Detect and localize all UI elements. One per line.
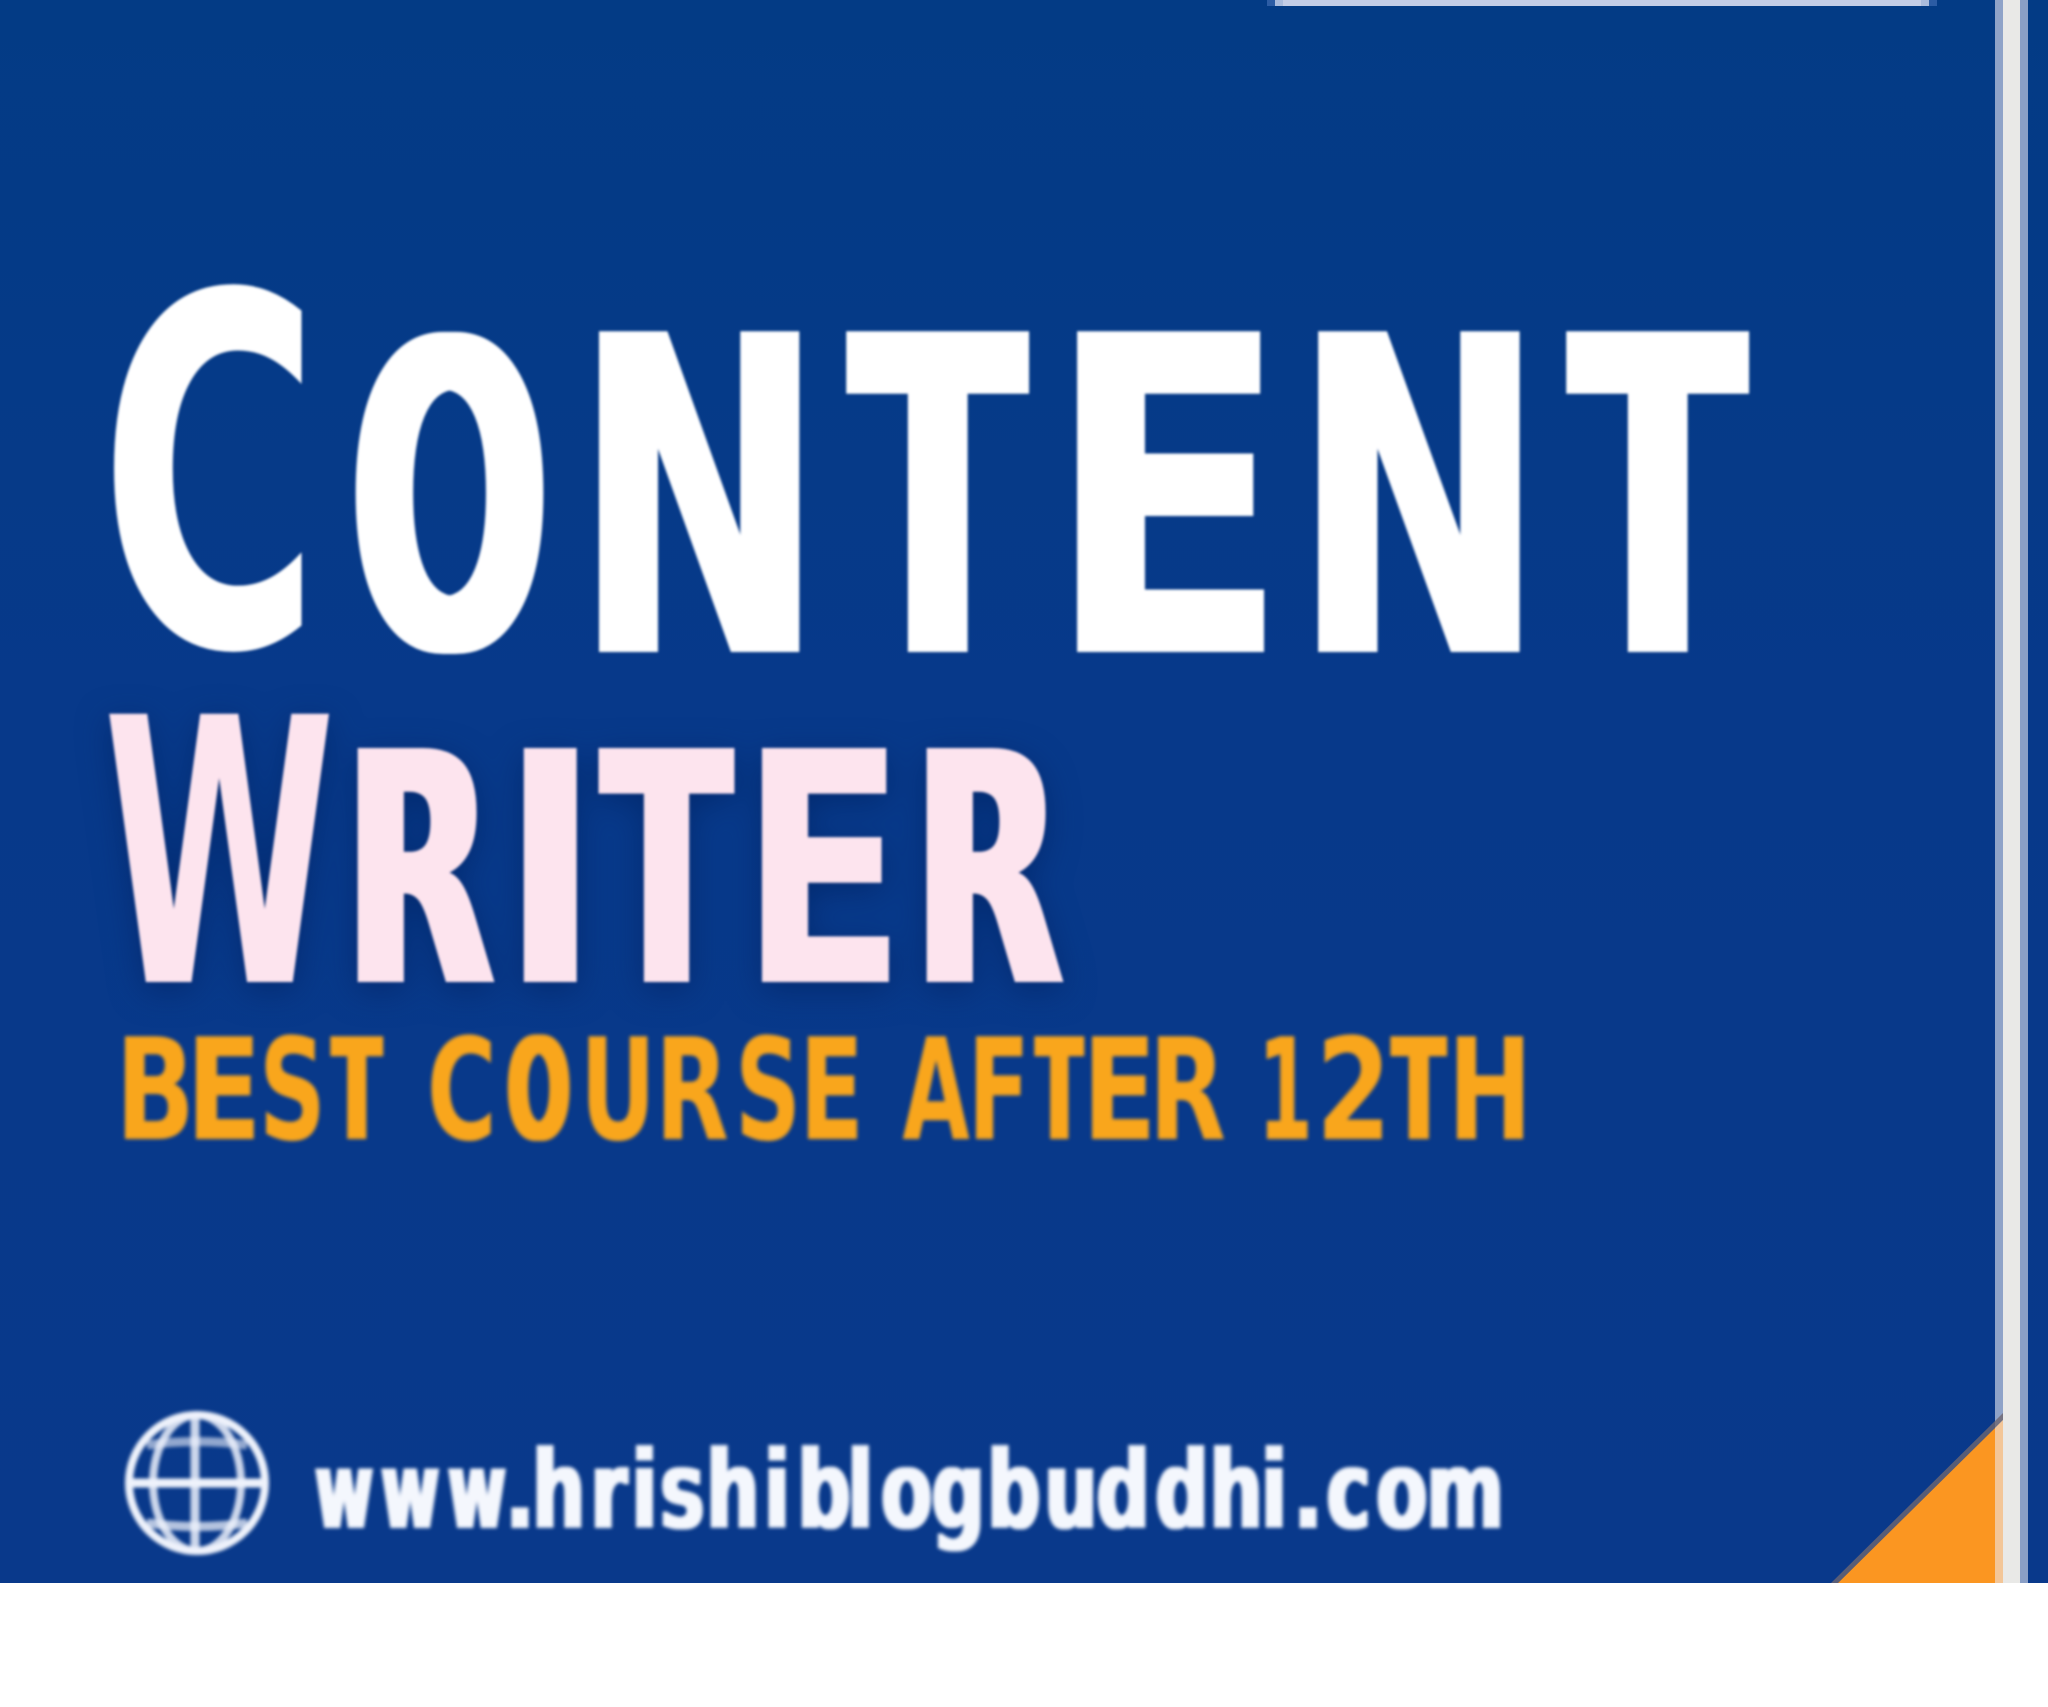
subheading: best course after 12th: R [655, 1009, 729, 1173]
top right light bar [1267, 0, 1937, 6]
subheading: best course after 12th: E [799, 1010, 864, 1173]
subheading: best course after 12th: O [507, 1008, 570, 1173]
website url: www [315, 1428, 506, 1555]
subheading: best course after 12th: S [259, 1009, 326, 1173]
subheading: best course after 12th: H [1448, 1008, 1532, 1172]
heading: Writer: R [914, 685, 1062, 1058]
corner triangle: orange [1831, 1413, 2003, 1583]
subheading: best course after 12th: B [115, 1009, 195, 1173]
icon: globe [129, 1415, 265, 1551]
subheading: best course after 12th: S [735, 1010, 801, 1173]
subheading: best course after 12th [115, 1008, 1532, 1173]
subheading: best course after 12th: T [1393, 1008, 1445, 1173]
heading: Writer: R [345, 685, 493, 1058]
heading: Content: C [99, 195, 321, 760]
heading: Content: N [1294, 244, 1544, 756]
subheading: best course after 12th: 1 [1258, 1008, 1313, 1172]
heading: Writer [103, 641, 1062, 1069]
heading: Content: E [1044, 244, 1290, 756]
subheading: best course after 12th: 2 [1316, 1008, 1391, 1173]
heading: Writer: I [498, 685, 603, 1059]
subheading: best course after 12th: U [580, 1009, 656, 1173]
heading: Content [99, 195, 1746, 760]
subheading: best course after 12th: R [1149, 1009, 1226, 1172]
subheading: best course after 12th: E [1082, 1008, 1157, 1173]
heading: Content: O [350, 254, 549, 750]
heading: Content: T [851, 243, 1026, 756]
heading: Writer: W [103, 641, 336, 1069]
heading: Writer: E [740, 685, 907, 1058]
website url: .hrishiblogbuddhi.com [506, 1426, 1504, 1554]
heading: Content: T [1571, 243, 1746, 756]
subheading: best course after 12th: A [902, 1008, 970, 1173]
subheading: best course after 12th: E [186, 1008, 262, 1172]
subheading: best course after 12th: F [968, 1008, 1030, 1172]
subheading: best course after 12th: T [1037, 1008, 1082, 1172]
heading: Writer: T [603, 684, 731, 1058]
subheading: best course after 12th: C [427, 1009, 497, 1173]
right vertical stripe [1995, 0, 2028, 1583]
heading: Content: N [575, 243, 824, 756]
subheading: best course after 12th: T [333, 1010, 381, 1173]
